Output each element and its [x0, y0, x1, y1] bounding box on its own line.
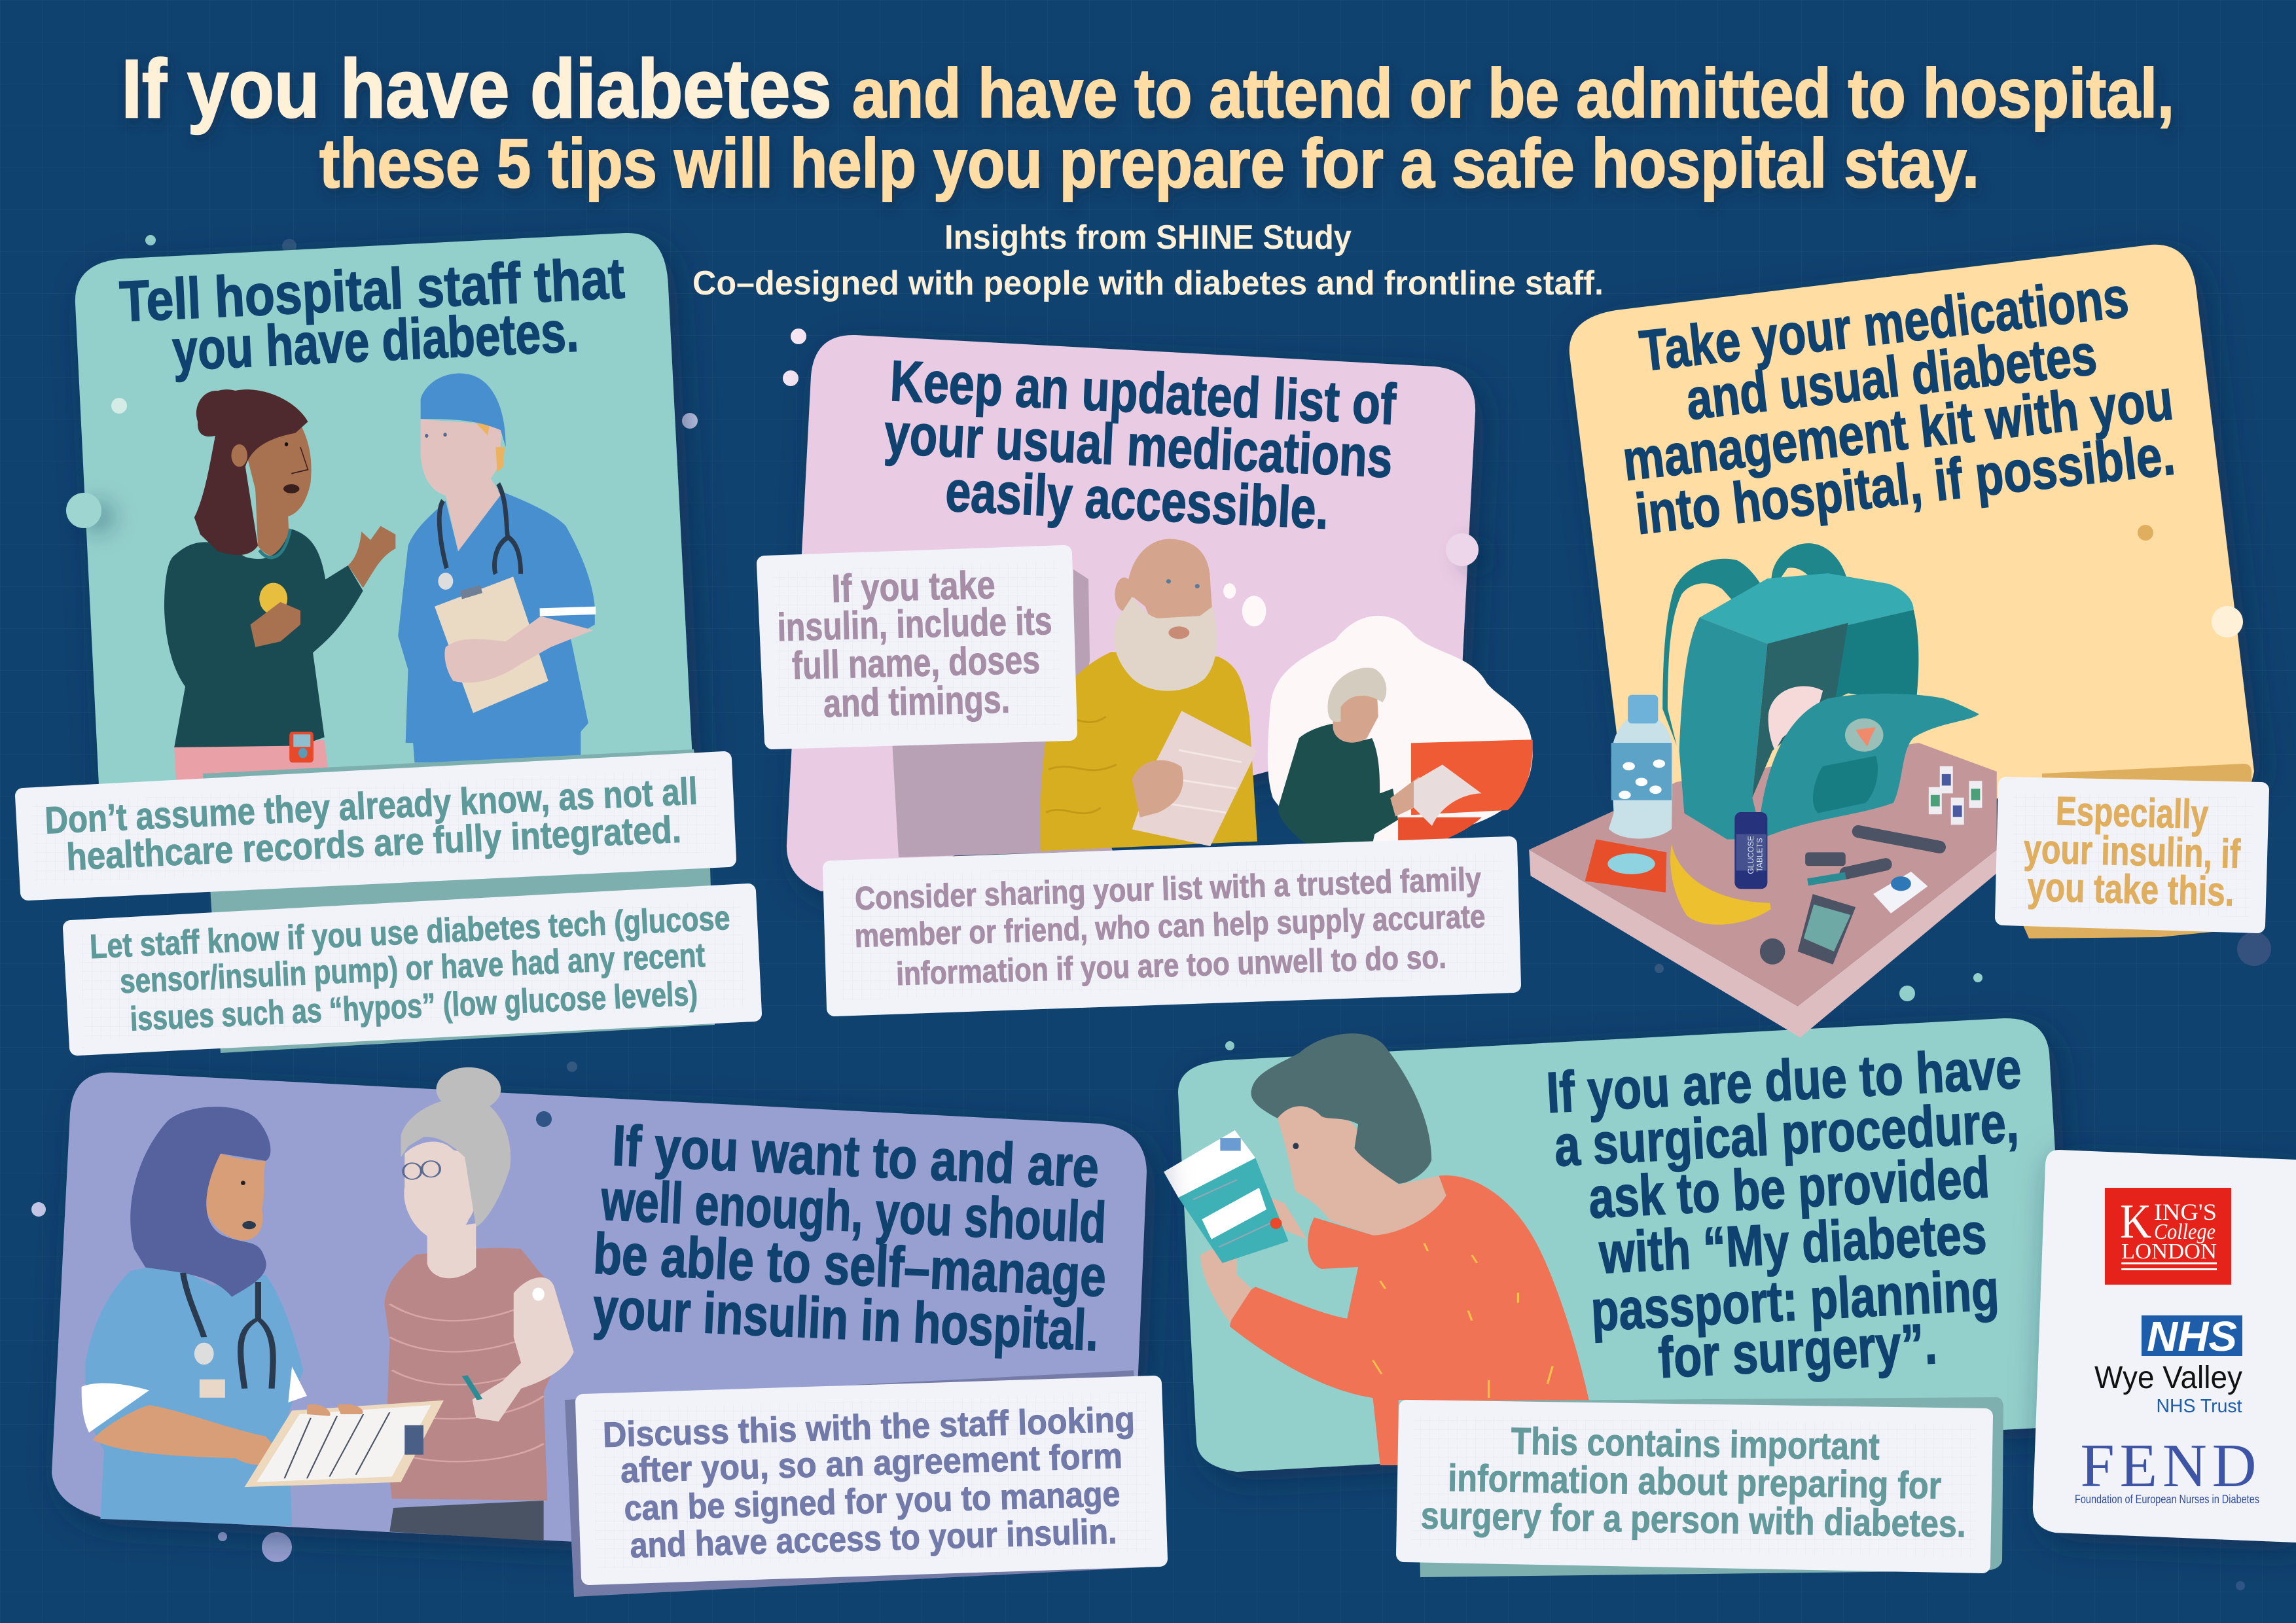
heading: self-manage insulin	[592, 1113, 1107, 1363]
callout: don't assume: healthcare records are fully integrated.	[65, 808, 682, 878]
heading: surgical procedure: with “My diabetes	[1597, 1201, 1988, 1286]
callout: agreement form: can be signed for you to manage	[624, 1474, 1121, 1528]
heading: take medications: management kit with you	[1619, 366, 2176, 493]
logo: NHS Wye Valley: NHS	[2147, 1313, 2237, 1360]
callout: don't assume	[23, 759, 728, 893]
illustration: woman and nurse talking	[164, 374, 596, 782]
heading: surgical procedure: ask to be provided	[1587, 1145, 1991, 1230]
heading: medication list: Keep an updated list of	[889, 348, 1397, 437]
logo: King's College London: College	[2154, 1220, 2215, 1244]
panel: take medications tip	[1529, 245, 2261, 1037]
panel 4 background	[52, 1073, 1147, 1542]
heading: self-manage insulin: If you want to and are	[611, 1113, 1100, 1200]
callout: passport information	[1404, 1408, 1985, 1565]
title: If you have diabetes	[122, 43, 831, 135]
dot on panel	[536, 1111, 552, 1127]
illustration: person reading passport	[1164, 1033, 1589, 1465]
callout: share your list: Consider sharing your list with a trusted family	[854, 861, 1482, 917]
card shadow	[1417, 1397, 2003, 1577]
logo: NHS Wye Valley: Wye Valley	[2094, 1361, 2242, 1395]
panel 5 background	[1178, 1018, 2062, 1472]
panel 2 background	[787, 335, 1475, 891]
callout: especially insulin: your insulin, if	[2023, 827, 2241, 877]
callout: especially insulin	[2003, 785, 2261, 925]
callout: agreement form	[583, 1383, 1160, 1577]
logo: King's College London: K	[2120, 1195, 2151, 1249]
callout: especially insulin: you take this.	[2027, 865, 2234, 915]
heading: medication list: easily accessible.	[944, 458, 1330, 541]
callout: agreement form: Discuss this with the staff looking	[602, 1400, 1136, 1455]
heading: tell hospital staff	[118, 245, 626, 383]
panel: medication list tip	[764, 335, 1533, 1008]
callout: passport information: information about preparing for	[1448, 1457, 1942, 1507]
callout: don't assume: Don’t assume they already know, as not all	[44, 770, 698, 842]
decorative dots on panel	[66, 398, 127, 528]
subtitle: Co–designed with people with diabetes and frontline staff.	[692, 264, 1604, 302]
callout: especially insulin: Especially	[2055, 789, 2209, 838]
callout: insulin details	[764, 553, 1069, 741]
logo: NHS Wye Valley	[2094, 1313, 2242, 1417]
callout: insulin details: full name, doses	[791, 637, 1041, 688]
panel 1 background	[75, 233, 694, 812]
callout: diabetes tech: issues such as “hypos” (low glucose levels)	[129, 974, 698, 1039]
callout: insulin details: and timings.	[823, 677, 1011, 725]
callout: share your list: member or friend, who can help supply accurate	[854, 898, 1486, 954]
subtitle	[692, 219, 1604, 302]
logo: FEND: FEND	[2080, 1432, 2257, 1500]
callout: share your list: information if you are too unwell to do so.	[895, 938, 1447, 992]
card shadow	[203, 749, 715, 1053]
illustration: backpack and diabetes kit on table: TABLETS	[1756, 838, 1765, 872]
panel 3 background	[1570, 245, 2254, 805]
heading: take medications	[1619, 264, 2178, 546]
logo: NHS Wye Valley: NHS Trust	[2156, 1396, 2242, 1417]
card shadow	[2019, 764, 2251, 938]
callout: passport information: This contains important	[1511, 1420, 1880, 1468]
heading: self-manage insulin: your insulin in hospital.	[592, 1275, 1100, 1363]
heading: take medications: Take your medications	[1636, 264, 2132, 383]
heading: surgical procedure: passport: planning	[1589, 1257, 2001, 1343]
callout: passport information: surgery for a person with diabetes.	[1420, 1494, 1966, 1546]
logo panel background	[2033, 1150, 2296, 1543]
heading: surgical procedure	[1545, 1035, 2022, 1390]
illustration: backpack and diabetes kit on table: GLUCOSE	[1747, 836, 1755, 874]
heading: self-manage insulin: well enough, you should	[600, 1168, 1107, 1255]
heading: surgical procedure: a surgical procedure,	[1552, 1090, 2020, 1179]
callout: share your list	[831, 844, 1513, 1008]
decorative dots on panel	[2138, 525, 2243, 637]
callout: agreement form: after you, so an agreement form	[620, 1436, 1123, 1490]
card shadow	[892, 569, 1113, 857]
heading: surgical procedure: for surgery”.	[1657, 1311, 1939, 1390]
heading: take medications: into hospital, if possible.	[1632, 421, 2178, 546]
heading: take medications: and usual diabetes	[1683, 321, 2100, 432]
subtitle: Insights from SHINE Study	[944, 219, 1352, 257]
illustration: nurse and patient	[82, 1067, 574, 1541]
logo: King's College London: ING'S	[2154, 1199, 2217, 1225]
heading: tell hospital staff: you have diabetes.	[171, 298, 580, 383]
logo: King's College London: LONDON	[2121, 1240, 2217, 1264]
callout: agreement form: and have access to your insulin.	[630, 1512, 1117, 1565]
callout: diabetes tech	[71, 891, 754, 1048]
panel: surgical procedure tip	[1164, 1018, 2062, 1577]
illustration: backpack and diabetes kit on table	[1529, 543, 1997, 1037]
panel: tell hospital staff tip	[23, 233, 754, 1053]
heading: medication list: your usual medications	[883, 401, 1394, 490]
callout: diabetes tech: Let staff know if you use diabetes tech (glucose	[89, 899, 731, 966]
logo: King's College London	[2105, 1188, 2231, 1285]
heading: tell hospital staff: Tell hospital staff that	[118, 245, 626, 334]
panel: partner logos	[2033, 1150, 2296, 1543]
heading: medication list	[883, 348, 1397, 541]
panel: self-manage insulin tip	[52, 1067, 1160, 1597]
callout: insulin details: insulin, include its	[777, 599, 1052, 649]
title: these 5 tips will help you prepare for a safe hospital stay.	[319, 125, 1979, 202]
heading: self-manage insulin: be able to self–manage	[592, 1221, 1107, 1309]
decorative dot	[1446, 533, 1479, 566]
callout: diabetes tech: sensor/insulin pump) or have had any recent	[119, 936, 706, 1001]
illustration: man with list and person with folder	[1041, 539, 1533, 853]
heading: surgical procedure: If you are due to have	[1545, 1035, 2022, 1125]
card shadow	[565, 1370, 1145, 1597]
callout: insulin details: If you take	[831, 563, 996, 611]
title	[122, 43, 2174, 202]
